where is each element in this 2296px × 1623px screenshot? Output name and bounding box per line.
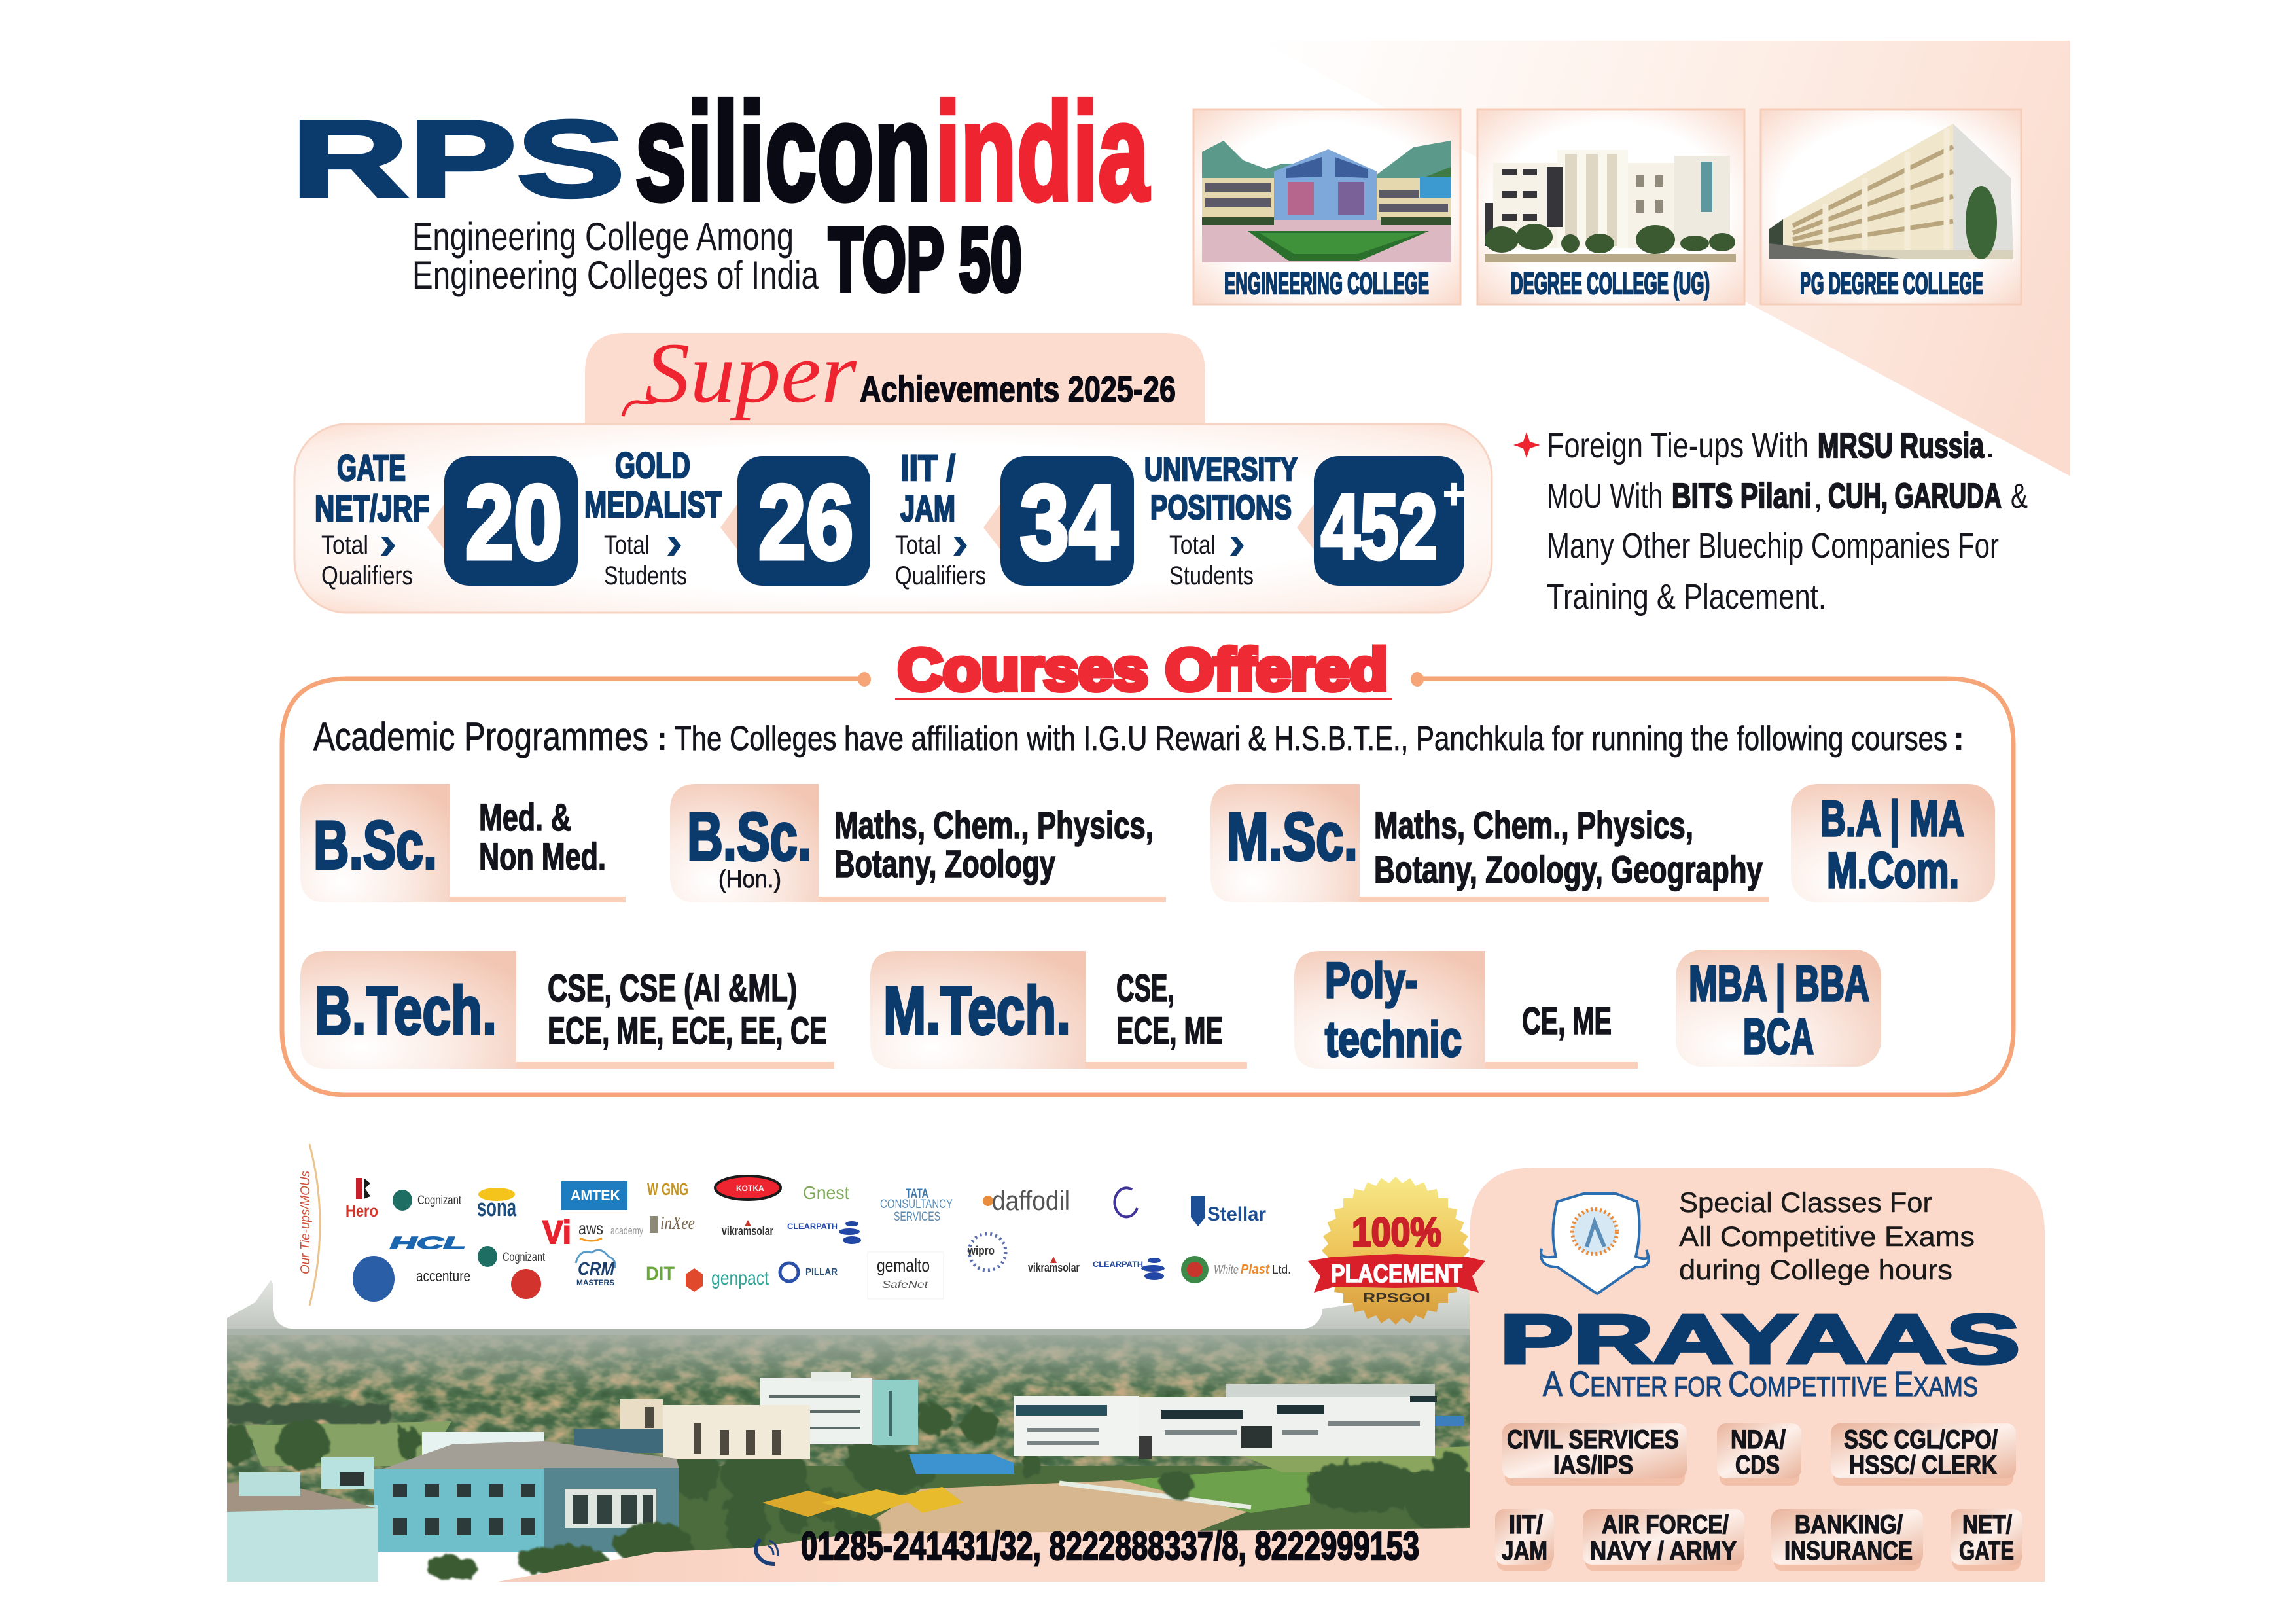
card: engineering college: [1193, 109, 1460, 304]
word: india: india: [935, 74, 1150, 229]
course: M.Sc.: Botany, Zoology, Geography: [1374, 849, 1763, 891]
word: silicon: silicon: [635, 74, 931, 229]
tie-ups arc: [309, 1144, 320, 1306]
mottled woodland: [227, 1335, 1470, 1505]
stat: university positions: POSITIONS: [1150, 489, 1292, 527]
tall white block: [760, 1372, 918, 1445]
logo: emblem: [1181, 1256, 1209, 1283]
logo: clearpath second: CLEARPATH: [1093, 1260, 1143, 1269]
icon: red star: [1513, 432, 1540, 458]
chip: NDA CDS: CDS: [1735, 1451, 1780, 1480]
course: BA MA M.Com: M.Com.: [1827, 843, 1959, 899]
white college building: [1014, 1384, 1464, 1459]
intro text: academic programmes: :: [1953, 720, 1964, 758]
tagline line 2: Engineering Colleges of India: [412, 253, 819, 297]
intro text: academic programmes: [313, 715, 1964, 758]
tree masses: [221, 1404, 1483, 1554]
logo: pillar: PILLAR: [805, 1266, 838, 1277]
chip: NET GATE: GATE: [1959, 1537, 2014, 1565]
logo: CRM masters: MASTERS: [576, 1278, 614, 1287]
logo: Plast Ltd: Plast: [1241, 1262, 1270, 1277]
course: M.Tech.: CSE,: [1116, 967, 1174, 1010]
line 2: MoU With: [1547, 476, 1663, 516]
course: B.Sc. Hons: [670, 784, 1166, 902]
stat: gold medalist: MEDALIST: [584, 484, 722, 525]
logo: aws academy: academy: [610, 1224, 643, 1237]
blue roof: [909, 1454, 1014, 1474]
dark hedge row: [227, 1404, 391, 1423]
logo: genpact: genpact: [711, 1268, 769, 1289]
vertical label: Our Tie-ups/MOUs: [298, 1171, 313, 1274]
stat: university positions: [1144, 451, 1464, 590]
line 1: .: [1985, 426, 1995, 465]
logo: gemalto: gemalto: [877, 1255, 930, 1275]
logo: PRAYAAS: PRAYAAS: [1500, 1301, 2020, 1378]
logo: TCS: [880, 1187, 953, 1224]
line 1: MRSU Russia: [1818, 426, 1985, 465]
yellow buses: [762, 1487, 963, 1517]
phone numbers: [756, 1524, 1419, 1568]
logo heading: RPS silicon india: [291, 74, 1150, 229]
ground greenery: [679, 1466, 1470, 1551]
stat: gold medalist: [584, 444, 870, 590]
special classes text: [1679, 1187, 1975, 1286]
course: M.Sc.: M.Sc.: [1227, 799, 1358, 875]
course: polytechnic: CE, ME: [1522, 1000, 1612, 1043]
logo: clearpath: [787, 1221, 861, 1244]
card: degree college: [1477, 109, 1744, 304]
logo: vikram solar: [722, 1220, 773, 1238]
logo: wipro: wipro: [967, 1244, 995, 1257]
sports field: [245, 1421, 451, 1466]
tab: super achievements: [585, 325, 1205, 424]
line 4: Training & Placement.: [1547, 577, 1826, 616]
chip: civil services: [1502, 1423, 1687, 1486]
logo: TCS: SERVICES: [894, 1210, 940, 1224]
chip: civil services: IAS/IPS: [1553, 1451, 1633, 1480]
stat: GATE NET/JRF: 20: [465, 463, 562, 580]
course: B.Sc. Hons: Botany, Zoology: [834, 843, 1055, 885]
course: B.Tech.: [300, 951, 834, 1069]
logo: vikram solar second: vikramsolar: [1028, 1261, 1080, 1274]
logo: Vi: Vi: [542, 1214, 571, 1251]
logo: Hero: [345, 1178, 378, 1221]
logo: Cognizant: Cognizant: [417, 1194, 462, 1207]
icon: phone: [756, 1539, 778, 1564]
teal main building: [321, 1429, 679, 1552]
phone strip: [498, 1528, 1470, 1582]
panel: Prayaas: [1470, 1168, 2045, 1582]
course: M.Tech.: M.Tech.: [883, 973, 1070, 1049]
stat: IIT JAM: JAM: [900, 488, 955, 529]
course: M.Tech.: [870, 951, 1247, 1069]
course: polytechnic: technic: [1325, 1012, 1462, 1067]
heading: achievements: Achievements 2025-26: [860, 368, 1176, 410]
photo: PG degree college: [1769, 124, 2013, 259]
logo: wipro: [967, 1234, 1006, 1270]
logo: gemalto: [868, 1252, 944, 1299]
logo: TCS: CONSULTANCY: [880, 1198, 953, 1211]
logo: round C: [1114, 1188, 1137, 1217]
line 2: BITS Pilani: [1672, 476, 1812, 516]
stat: university positions: Students: [1169, 562, 1254, 590]
chip: banking: BANKING/: [1795, 1510, 1903, 1539]
line 1: Foreign Tie-ups With: [1547, 426, 1809, 465]
beige block: [620, 1399, 810, 1459]
line 2: CUH, GARUDA: [1828, 476, 2002, 516]
logo: aws academy: aws: [578, 1219, 603, 1238]
hills: [227, 1280, 1470, 1335]
logo: vikram solar second: [1028, 1257, 1080, 1274]
logo: inXee: [650, 1213, 695, 1234]
chip: IIT JAM: [1495, 1509, 1554, 1571]
logo: vikram solar: vikramsolar: [722, 1224, 773, 1238]
logo: clearpath second: [1093, 1258, 1165, 1280]
logo: sona: sona: [477, 1194, 517, 1222]
word: Super: Super: [645, 325, 857, 421]
line 2: &: [2011, 476, 2028, 516]
logo: Plast Ltd: White: [1214, 1263, 1239, 1276]
line 3: Many Other Bluechip Companies For: [1547, 526, 1999, 565]
stat: GATE NET/JRF: [315, 447, 578, 590]
sub heading: center for competitive exams: A CENTER FOR COMPETITIVE EXAMS: [1543, 1364, 1978, 1404]
course: B.Sc.: B.Sc.: [313, 808, 437, 883]
stat: university positions: 452: [1321, 475, 1438, 578]
white tower foreground: [227, 1472, 378, 1582]
course: MBA BBA BCA: [1676, 950, 1881, 1067]
course: MBA BBA BCA: MBA | BBA: [1689, 956, 1869, 1012]
logo: CRM masters: CRM: [578, 1258, 615, 1279]
logo: RPS: RPS: [291, 99, 625, 220]
tagline TOP 50: TOP 50: [828, 209, 1022, 310]
logo: DIT: DIT: [646, 1263, 675, 1285]
logo: blue seal: [353, 1256, 395, 1302]
special classes text: Special Classes For: [1679, 1187, 1932, 1219]
stat: gold medalist: Total: [604, 531, 650, 560]
chip: NET GATE: [1951, 1509, 2022, 1571]
course: B.Tech.: CSE, CSE (AI &ML): [548, 967, 797, 1010]
special classes text: during College hours: [1679, 1255, 1952, 1286]
chip: air force: NAVY / ARMY: [1590, 1537, 1737, 1565]
icon: crest shield: [1541, 1194, 1649, 1294]
logo: Plast Ltd: Ltd.: [1272, 1263, 1291, 1276]
logo: TCS: TATA: [906, 1187, 928, 1201]
badge RPSGOI: RPSGOI: [1363, 1291, 1430, 1306]
logo: Stellar: [1191, 1196, 1266, 1226]
chip: banking: INSURANCE: [1784, 1537, 1913, 1565]
badge: 100% placement: [1308, 1171, 1485, 1329]
course: B.Sc. Hons: B.Sc.: [687, 799, 811, 875]
course: M.Tech.: ECE, ME: [1116, 1010, 1223, 1052]
special classes text: All Competitive Exams: [1679, 1221, 1975, 1253]
tagline line 1: Engineering College Among: [412, 215, 794, 259]
intro text: academic programmes: :: [656, 720, 667, 758]
chip: banking: [1771, 1509, 1923, 1571]
stat: gold medalist: 26: [758, 463, 853, 580]
text block: foreign tie-ups: [1513, 426, 2028, 616]
swash on Super: [623, 401, 658, 416]
course: B.Sc. Hons: Maths, Chem., Physics,: [834, 804, 1154, 847]
stat: university positions: +: [1443, 472, 1464, 517]
course: M.Sc.: [1210, 784, 1769, 902]
fence: [1059, 1483, 1251, 1507]
logo: Plast Ltd: [1214, 1262, 1291, 1277]
heading: courses offered: Courses Offered: [898, 637, 1388, 703]
logo: Cognizant: [393, 1190, 462, 1211]
card label: ENGINEERING COLLEGE: [1224, 266, 1429, 300]
logo: HCL: HCL: [390, 1233, 466, 1253]
course: B.Tech.: B.Tech.: [315, 973, 497, 1049]
logo: nest: Gnest: [803, 1183, 849, 1203]
phone text: 01285-241431/32, 8222888337/8, 8222999153: [801, 1524, 1419, 1568]
logo: red oval: KOTKA: [736, 1184, 764, 1193]
stat: university positions: Total: [1169, 531, 1216, 560]
lawn: [1122, 1465, 1310, 1513]
course: BA MA M.Com: B.A | MA: [1820, 791, 1964, 847]
chip: IIT JAM: JAM: [1502, 1537, 1547, 1565]
panel frame: courses offered: [282, 679, 2013, 1095]
course: BA MA M.Com: [1791, 784, 1995, 902]
stat: GATE NET/JRF: GATE: [337, 447, 406, 488]
stat: IIT JAM: [895, 447, 1134, 590]
chip: SSC: HSSC/ CLERK: [1849, 1451, 1997, 1480]
stat: GATE NET/JRF: NET/JRF: [315, 488, 429, 529]
card label: DEGREE COLLEGE (UG): [1511, 266, 1710, 300]
intro text: academic programmes: The Colleges have affiliation with I.G.U Rewari & H.S.B.T.E., Panchkula for running the following courses: [675, 720, 1947, 758]
right field strip: [1243, 1446, 1470, 1472]
stat: university positions: UNIVERSITY: [1144, 451, 1298, 488]
stat: GATE NET/JRF: Qualifiers: [321, 562, 413, 590]
chip: IIT JAM: IIT/: [1509, 1510, 1543, 1539]
card label: PG DEGREE COLLEGE: [1800, 266, 1983, 300]
stat: IIT JAM: Total: [895, 531, 941, 560]
logo: sona: [477, 1188, 517, 1222]
panel: tie-ups logo strip: [273, 1132, 1322, 1329]
logo: accenture: accenture: [416, 1268, 470, 1285]
logo: GNG: W GNG: [647, 1179, 688, 1199]
logo: Stellar: Stellar: [1207, 1204, 1266, 1225]
line 2: ,: [1813, 476, 1823, 516]
badge 100 percent: 100%: [1352, 1210, 1441, 1255]
stat: IIT JAM: 34: [1020, 463, 1118, 580]
photo: degree college: [1485, 150, 1736, 262]
intro text: academic programmes: Academic Programmes: [313, 715, 648, 758]
background: peach corner triangle: [1260, 41, 2070, 476]
course: B.Sc.: Med. &: [479, 796, 571, 839]
badge starburst: [1315, 1171, 1476, 1329]
dirt yard: [851, 1480, 1251, 1535]
course: B.Tech.: ECE, ME, ECE, EE, CE: [548, 1010, 827, 1052]
card: PG degree college: [1761, 109, 2021, 304]
logo: Amtek: [561, 1181, 627, 1210]
course: B.Sc.: [300, 784, 626, 902]
course: B.Sc.: Non Med.: [479, 836, 606, 878]
chip: NDA CDS: NDA/: [1731, 1425, 1786, 1454]
tagline: [412, 209, 1022, 310]
course: polytechnic: Poly-: [1325, 953, 1418, 1008]
chip: NET GATE: NET/: [1962, 1510, 2012, 1539]
logo: clearpath: CLEARPATH: [787, 1222, 838, 1231]
chip: air force: [1583, 1509, 1744, 1571]
logo: Cognizant second: [478, 1246, 546, 1267]
chip: SSC: SSC CGL/CPO/: [1844, 1425, 1998, 1454]
foreground shrubs: [425, 1522, 694, 1579]
logo: pillar: [780, 1263, 838, 1281]
logo: daffodil: daffodil: [992, 1185, 1070, 1216]
chip: SSC: [1831, 1423, 2016, 1486]
course: B.Sc. Hons: (Hon.): [718, 866, 781, 893]
badge placement text: PLACEMENT: [1331, 1260, 1462, 1288]
course: M.Sc.: Maths, Chem., Physics,: [1374, 804, 1693, 847]
logo: aws academy: [578, 1219, 643, 1241]
logo: red circle: [511, 1269, 541, 1299]
logo: Cognizant second: Cognizant: [503, 1251, 546, 1264]
stat: gold medalist: GOLD: [615, 444, 690, 486]
haze over woodland: [227, 1329, 1470, 1394]
line 2: [1547, 476, 2028, 516]
logo: Hero: Hero: [345, 1202, 378, 1221]
stat: GATE NET/JRF: Total: [321, 531, 368, 560]
photo: campus aerial view: [221, 1276, 1483, 1582]
stat: IIT JAM: IIT /: [900, 447, 955, 488]
chip: air force: AIR FORCE/: [1602, 1510, 1729, 1539]
stat: IIT JAM: Qualifiers: [895, 562, 986, 590]
course: polytechnic: [1294, 951, 1638, 1069]
logo: CRM masters: [576, 1250, 615, 1287]
course: MBA BBA BCA: BCA: [1743, 1009, 1814, 1065]
logo: genpact: [686, 1268, 769, 1292]
logo: gemalto: SafeNet: [882, 1279, 928, 1291]
stat: gold medalist: Students: [604, 562, 687, 590]
pointers beside number boxes: [427, 504, 1314, 550]
frame end dots: [858, 672, 1424, 687]
chip: civil services: CIVIL SERVICES: [1507, 1425, 1679, 1454]
logo: red oval: [715, 1176, 781, 1200]
photo: engineering college: [1202, 141, 1451, 262]
chip: NDA CDS: [1717, 1423, 1801, 1486]
logo: inXee: inXee: [660, 1213, 695, 1234]
panel: achievement statistics: [294, 424, 1492, 613]
logo: Amtek: AMTEK: [571, 1187, 620, 1204]
badge ribbon: [1308, 1254, 1485, 1293]
